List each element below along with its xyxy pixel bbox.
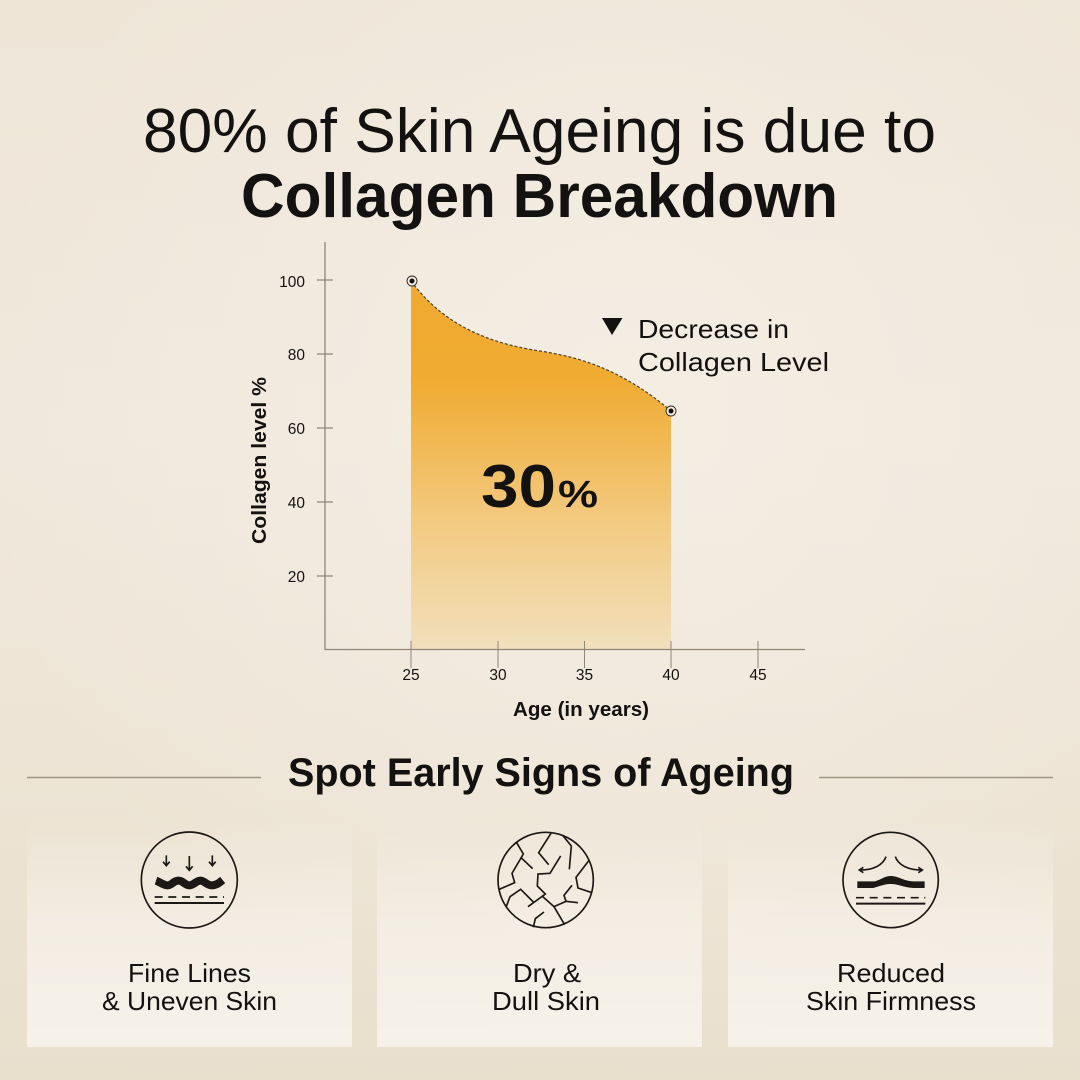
decrease callout (602, 314, 829, 377)
label (492, 958, 600, 1016)
callout text: Decrease in (638, 314, 789, 344)
label (806, 958, 976, 1016)
dashed decline curve (411, 281, 671, 411)
30% value: % (558, 474, 598, 516)
callout text (638, 314, 829, 377)
x axis title: Age (in years) (513, 699, 649, 721)
label: Fine Lines (128, 958, 251, 988)
icon: down triangle (602, 318, 622, 335)
x axis labels (402, 667, 767, 684)
end marker (666, 406, 676, 416)
x axis labels: 30 (489, 667, 507, 684)
x axis labels: 45 (749, 667, 767, 684)
x axis labels: 40 (662, 667, 680, 684)
section heading: Spot Early Signs of Ageing (288, 751, 794, 795)
chart: collagen level by age (249, 242, 829, 721)
icon: sagging skin layer (843, 832, 938, 928)
label (102, 958, 277, 1016)
panel: dry and dull skin (377, 820, 702, 1047)
x axis labels: 25 (402, 667, 420, 684)
area under curve (411, 281, 671, 650)
title: 80% of Skin Ageing is due to (143, 97, 936, 166)
title: Collagen Breakdown (241, 162, 838, 231)
label: Dry & (513, 958, 581, 988)
x axis labels: 35 (576, 667, 593, 684)
y axis labels: 100 (279, 274, 305, 291)
start marker (407, 276, 417, 286)
axes and ticks (317, 242, 805, 668)
y axis labels (279, 274, 305, 586)
30% value (481, 453, 598, 520)
y axis title: Collagen level % (249, 377, 271, 544)
callout text: Collagen Level (638, 347, 829, 377)
title (143, 97, 936, 231)
label: Dull Skin (492, 986, 600, 1016)
label: & Uneven Skin (102, 986, 277, 1016)
30% value: 30 (481, 453, 556, 520)
panel: reduced firmness (728, 820, 1053, 1047)
panel: fine lines (27, 820, 352, 1047)
y axis labels: 80 (288, 347, 305, 364)
label: Reduced (837, 958, 945, 988)
y axis labels: 60 (288, 421, 305, 438)
y axis labels: 40 (288, 495, 305, 512)
icon: wrinkled skin layer (141, 832, 237, 928)
icon: cracked skin (498, 832, 593, 928)
label: Skin Firmness (806, 986, 976, 1016)
y axis labels: 20 (288, 569, 305, 586)
